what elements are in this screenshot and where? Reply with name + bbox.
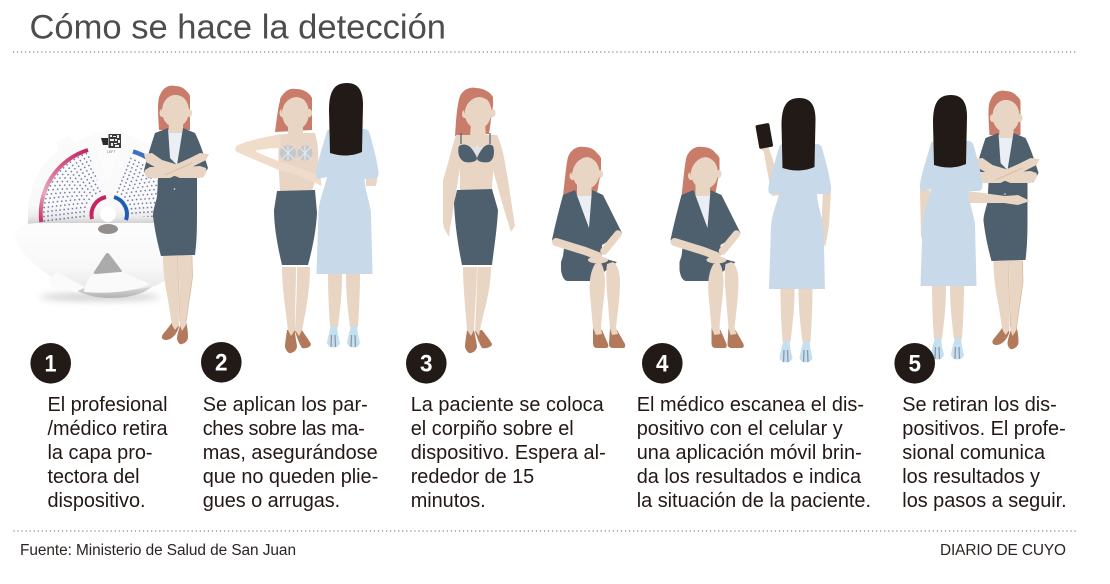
step 1 text: dispositivo. xyxy=(48,490,146,512)
step 3 text: el corpiño sobre el xyxy=(411,418,574,440)
step 3 text: dispositivo. Espera al- xyxy=(411,442,606,464)
number badge 5 xyxy=(894,343,935,384)
step 5 text: los pasos a seguir. xyxy=(902,490,1067,512)
figure: patient applying patches xyxy=(235,83,379,353)
publisher credit: DIARIO DE CUYO xyxy=(940,542,1066,559)
number badge 3: 3 xyxy=(420,350,432,377)
patch: left xyxy=(280,145,296,161)
icon: breast screening device xyxy=(15,132,200,301)
step 5 text: sional comunica xyxy=(902,442,1046,464)
step 1 xyxy=(30,343,168,512)
corpiño xyxy=(458,133,494,162)
number badge 1 xyxy=(30,343,71,384)
step 2 text: ches sobre las ma- xyxy=(203,418,365,440)
step 1 text: la capa pro- xyxy=(48,442,152,464)
bottom dotted rule xyxy=(14,530,1076,532)
step 3 text xyxy=(411,394,606,512)
patch: right xyxy=(298,146,312,160)
step 5 text: positivos. El profe- xyxy=(902,418,1066,440)
step 1 text: tectora del xyxy=(48,466,140,488)
step 4 text: da los resultados e indica xyxy=(637,466,862,488)
figure: seated patient during scan xyxy=(670,147,744,348)
step 5 text: los resultados y xyxy=(902,466,1040,488)
step 4 text xyxy=(637,394,871,512)
device base xyxy=(15,223,200,298)
number badge 1: 1 xyxy=(44,350,56,377)
figure: professional next to device xyxy=(144,86,209,344)
figure: seated patient waiting xyxy=(552,147,625,348)
step 5 text xyxy=(902,394,1067,512)
number badge 4: 4 xyxy=(656,350,669,377)
step 3 text: minutos. xyxy=(411,490,486,512)
number badge 5: 5 xyxy=(908,350,921,377)
step 3 xyxy=(406,343,606,512)
number badge 2: 2 xyxy=(215,349,228,376)
step 3 text: rededor de 15 xyxy=(411,466,534,488)
step 5 text: Se retiran los dis- xyxy=(902,394,1057,416)
step 2 text: que no queden plie- xyxy=(203,466,378,488)
step 2 text: mas, asegurándose xyxy=(203,442,378,464)
step 4 text: positivo con el celular y xyxy=(637,418,843,440)
step 2 text: Se aplican los par- xyxy=(203,394,368,416)
step 4 xyxy=(637,343,871,512)
step 5 xyxy=(894,343,1067,512)
number badge 2 xyxy=(201,342,242,383)
step 4 text: la situación de la paciente. xyxy=(637,490,871,512)
icon: phone xyxy=(755,123,773,149)
number badge 4 xyxy=(642,343,683,384)
step 1 text xyxy=(48,394,168,512)
step 1 text: El profesional xyxy=(48,394,168,416)
step 3 text: La paciente se coloca xyxy=(411,394,605,416)
step 2 text xyxy=(203,394,378,512)
device shadow xyxy=(40,293,160,301)
step 4 text: El médico escanea el dis- xyxy=(637,394,864,416)
step 2 text: gues o arrugas. xyxy=(203,490,340,512)
device disc xyxy=(28,132,188,226)
figure: doctor scanning with phone xyxy=(755,98,831,362)
figure: doctor touching professional's arm xyxy=(920,95,1030,360)
title: Cómo se hace la detección xyxy=(30,8,446,46)
device disc: LEFT xyxy=(107,150,116,154)
step 4 text: una aplicación móvil brin- xyxy=(637,442,862,464)
top dotted rule xyxy=(14,51,1076,53)
figure: professional communicating results xyxy=(974,91,1040,349)
number badge 3 xyxy=(406,343,447,384)
source credit: Fuente: Ministerio de Salud de San Juan xyxy=(20,542,296,559)
step 1 text: /médico retira xyxy=(48,418,168,440)
step 2 xyxy=(201,342,378,512)
figure: patient wearing the bra device xyxy=(443,88,515,353)
